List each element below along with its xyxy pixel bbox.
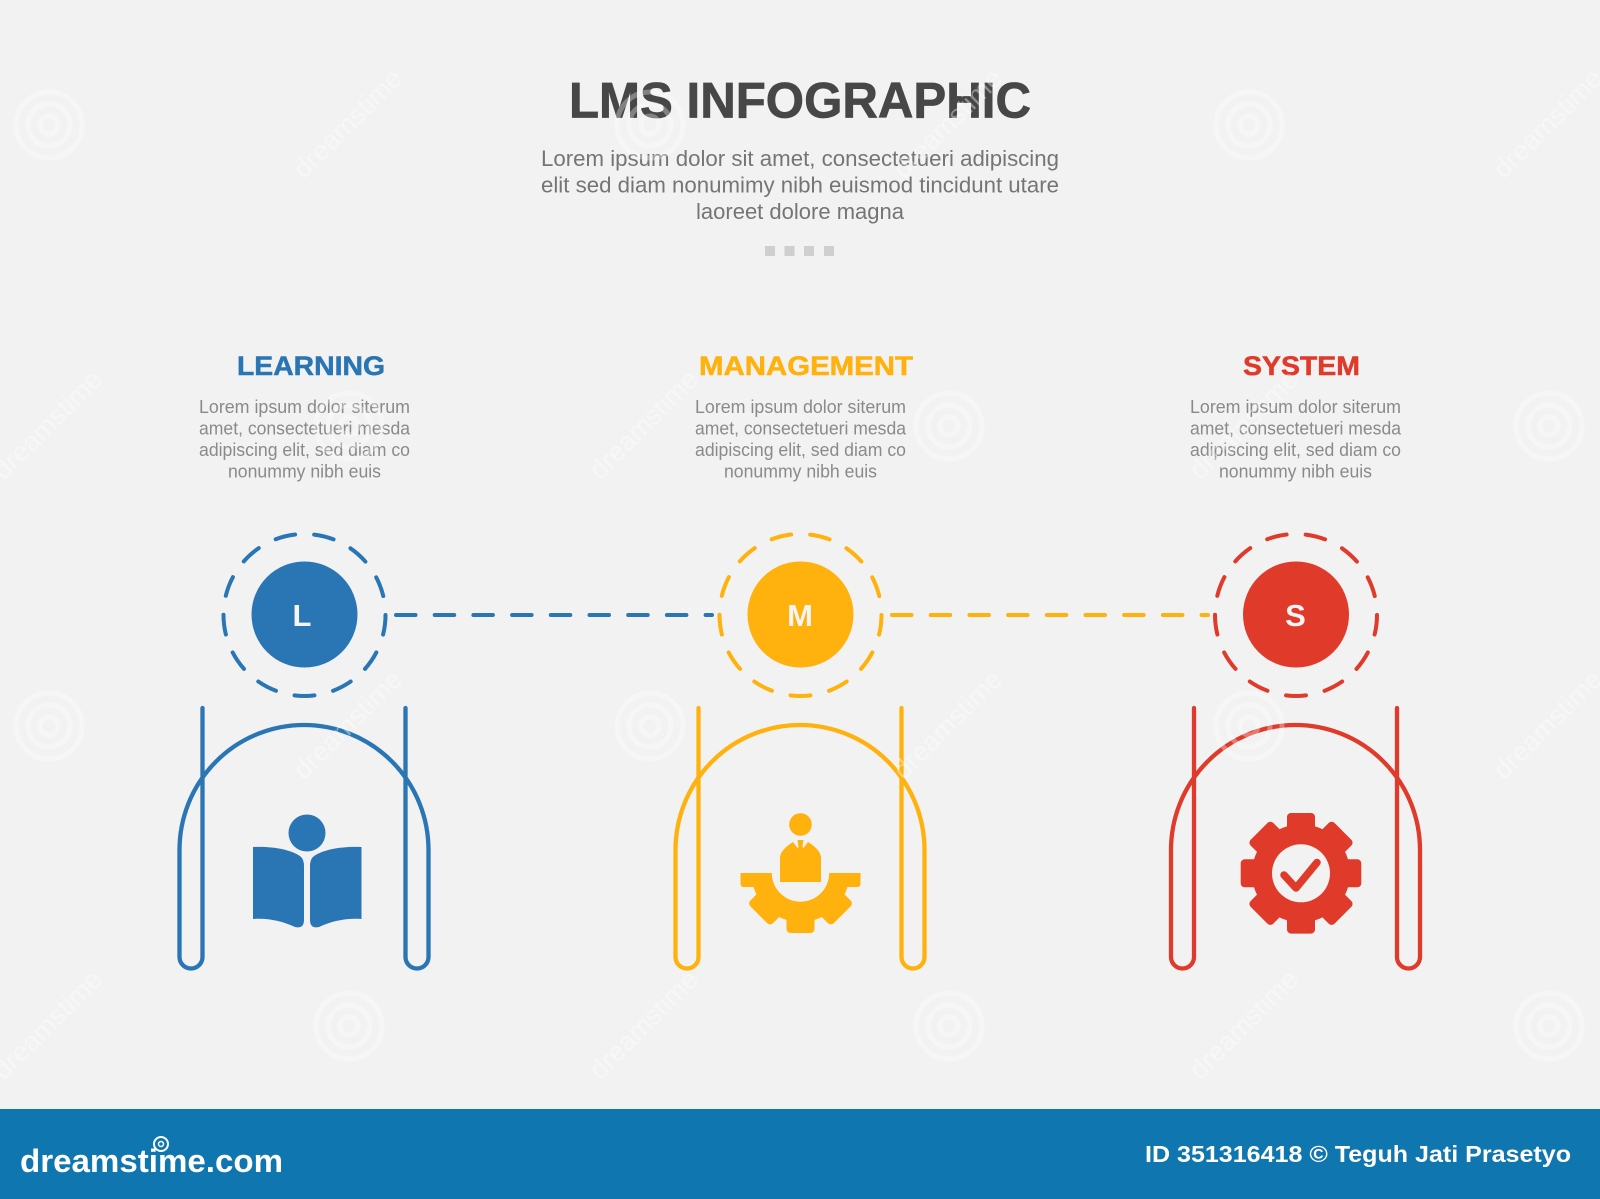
arch frame: system xyxy=(1171,708,1420,968)
footer band xyxy=(0,1109,1600,1199)
watermark overlay: dreamstime xyxy=(887,63,1008,184)
description: system: adipiscing elit, sed diam co xyxy=(1190,440,1401,460)
description: system: amet, consectetueri mesda xyxy=(1190,418,1402,438)
description: management: nonummy nibh euis xyxy=(724,462,877,482)
title: LMS INFOGRAPHIC xyxy=(569,72,1031,128)
watermark overlay: dreamstime xyxy=(287,664,408,785)
icon: manager on gear xyxy=(740,813,860,933)
watermark overlay: dreamstime xyxy=(583,964,704,1085)
badge: L: L xyxy=(293,598,311,633)
badge: S xyxy=(1215,534,1377,696)
description: learning: nonummy nibh euis xyxy=(228,462,381,482)
panel: management xyxy=(676,351,924,968)
description: management: Lorem ipsum dolor siterum xyxy=(695,397,906,417)
badge: M: M xyxy=(787,598,813,633)
description: management: adipiscing elit, sed diam co xyxy=(695,440,906,460)
description: learning: Lorem ipsum dolor siterum xyxy=(199,397,410,417)
description: system: nonummy nibh euis xyxy=(1219,462,1372,482)
subtitle text block: elit sed diam nonumimy nibh euismod tincidunt utare xyxy=(541,172,1059,198)
icon: reading book xyxy=(253,814,362,927)
heading: learning: LEARNING xyxy=(237,351,385,381)
watermark overlay: dreamstime xyxy=(1183,964,1304,1085)
subtitle text block xyxy=(541,146,1059,224)
decorative title dots xyxy=(765,246,834,256)
dashed connector: learning to management xyxy=(396,613,712,617)
panel: learning xyxy=(180,351,428,968)
description: management xyxy=(695,397,907,482)
watermark overlay: dreamstime xyxy=(583,364,704,485)
subtitle text block: laoreet dolore magna xyxy=(696,199,905,224)
footer logo: dreamstime.com xyxy=(20,1143,283,1179)
footer credit: ID 351316418 © Teguh Jati Prasetyo xyxy=(1145,1141,1571,1167)
description: management: amet, consectetueri mesda xyxy=(695,418,907,438)
watermark overlay: dreamstime xyxy=(887,664,1008,785)
description: system: Lorem ipsum dolor siterum xyxy=(1190,397,1401,417)
panel: system xyxy=(1171,351,1420,968)
icon: gear with check mark xyxy=(1241,813,1361,934)
watermark overlay: dreamstime xyxy=(1183,364,1304,485)
badge: L xyxy=(224,534,386,696)
heading: system: SYSTEM xyxy=(1243,351,1360,381)
subtitle text block: Lorem ipsum dolor sit amet, consectetueri adipiscing xyxy=(541,146,1059,171)
description: learning xyxy=(199,397,411,482)
heading: management: MANAGEMENT xyxy=(699,351,914,381)
description: system xyxy=(1190,397,1402,482)
dashed connector: management to system xyxy=(892,613,1208,617)
description: learning: adipiscing elit, sed diam co xyxy=(199,440,410,460)
description: learning: amet, consectetueri mesda xyxy=(199,418,411,438)
arch frame: learning xyxy=(180,708,428,968)
badge: M xyxy=(720,534,882,696)
arch frame: management xyxy=(676,708,924,968)
watermark overlay: dreamstime xyxy=(287,63,408,184)
badge: S: S xyxy=(1285,598,1306,633)
